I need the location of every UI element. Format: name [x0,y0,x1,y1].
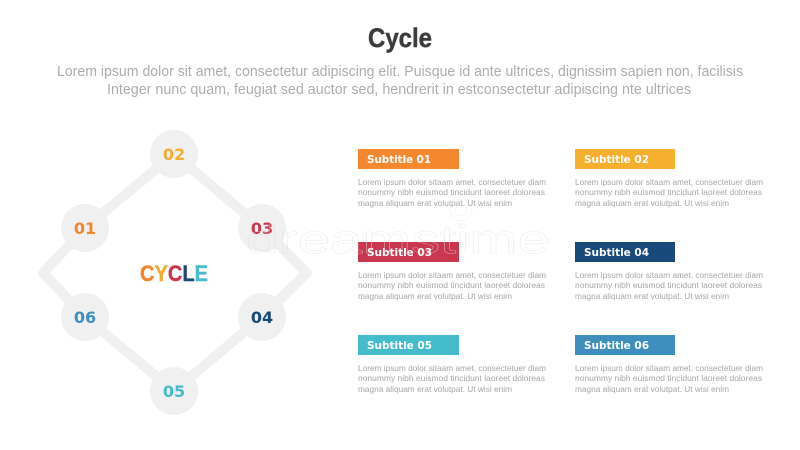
node 01: 01 [74,219,96,238]
panel: subtitle 01 [358,149,546,208]
panel: subtitle 03: Lorem ipsum dolor sitaam amet, consectetuer diam [358,270,546,280]
panel: subtitle 06 [575,335,763,394]
node 06: 06 [74,308,96,327]
panel: subtitle 03 [358,242,546,301]
intro text: Integer nunc quam, feugiat sed auctor sed, hendrerit in estconsectetur adipiscing nte ultrices [107,81,691,98]
watermark: dreamstime [246,218,550,262]
panel: subtitle 02 [575,149,763,208]
node 02 [150,130,198,178]
panel: subtitle 05: Lorem ipsum dolor sitaam amet, consectetuer diam [358,363,546,373]
panel: subtitle 05: magna aliquam erat volutpat. Ut wisi enim [358,384,512,394]
panel: subtitle 03: nonummy nibh euismod tincidunt laoreet doloreas [358,280,545,290]
node 01 [61,204,109,252]
panel: subtitle 02: Subtitle 02 [584,154,649,166]
panel: subtitle 03: magna aliquam erat volutpat. Ut wisi enim [358,291,512,301]
cycle diagram [43,130,307,415]
panel: subtitle 02: magna aliquam erat volutpat. Ut wisi enim [575,198,729,208]
title: Cycle [368,23,432,53]
center label: CYCLE [140,261,208,286]
panel: subtitle 05: Subtitle 05 [367,340,432,352]
node 06 [61,293,109,341]
node 02: 02 [163,145,185,164]
node 05 [150,367,198,415]
panel: subtitle 01: Subtitle 01 [367,154,431,166]
intro text [57,63,743,98]
node 04 [238,293,286,341]
panel: subtitle 06: Lorem ipsum dolor sitaam amet, consectetuer diam [575,363,763,373]
panel: subtitle 04: magna aliquam erat volutpat. Ut wisi enim [575,291,729,301]
panel: subtitle 01: magna aliquam erat volutpat. Ut wisi enim [358,198,512,208]
panel: subtitle 04: nonummy nibh euismod tincidunt laoreet doloreas [575,280,762,290]
panel: subtitle 01: nonummy nibh euismod tincidunt laoreet doloreas [358,187,545,197]
node 03: 03 [251,219,273,238]
panel: subtitle 05: nonummy nibh euismod tincidunt laoreet doloreas [358,373,545,383]
panel: subtitle 02: Lorem ipsum dolor sitaam amet, consectetuer diam [575,177,763,187]
panel: subtitle 01: Lorem ipsum dolor sitaam amet, consectetuer diam [358,177,546,187]
panel: subtitle 04 [575,242,763,301]
node 05: 05 [163,382,185,401]
panel: subtitle 06: nonummy nibh euismod tincidunt laoreet doloreas [575,373,762,383]
panel: subtitle 06: magna aliquam erat volutpat. Ut wisi enim [575,384,729,394]
node 03 [238,204,286,252]
node 04: 04 [251,308,273,327]
watermark [246,199,550,262]
panel: subtitle 03: Subtitle 03 [367,247,432,259]
panel: subtitle 04: Lorem ipsum dolor sitaam amet, consectetuer diam [575,270,763,280]
panel: subtitle 02: nonummy nibh euismod tincidunt laoreet doloreas [575,187,762,197]
diamond track [43,154,307,391]
intro text: Lorem ipsum dolor sit amet, consectetur adipiscing elit. Puisque id ante ultrices, dignissim sapien non, facilisis [57,63,743,80]
panel: subtitle 04: Subtitle 04 [584,247,649,259]
panel: subtitle 06: Subtitle 06 [584,340,649,352]
panel: subtitle 05 [358,335,546,394]
